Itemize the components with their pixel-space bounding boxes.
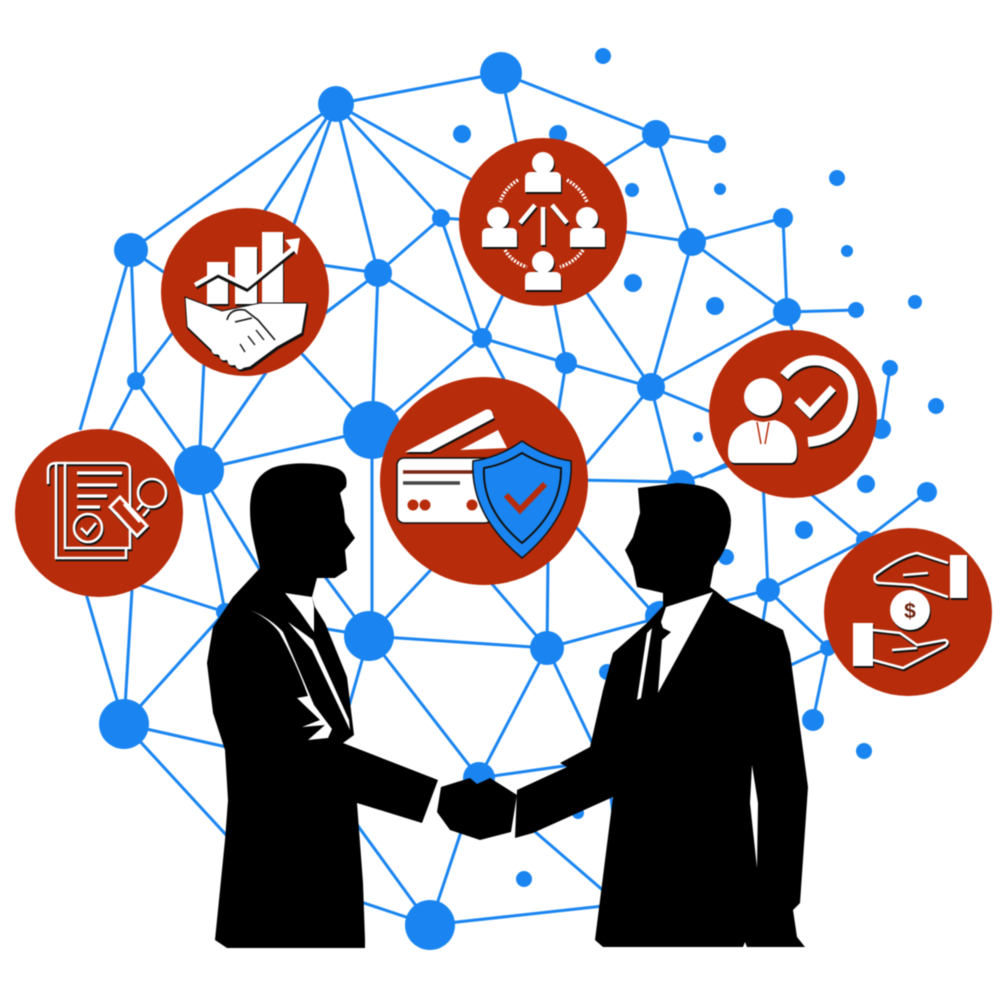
icon: credit cards and shield — [380, 377, 588, 585]
right man jacket gap — [750, 765, 758, 868]
icon: team network — [459, 138, 627, 306]
network: connected nodes — [99, 52, 937, 950]
dotted ring between people — [500, 180, 587, 267]
icon: contract document and stamp — [15, 429, 183, 597]
shield with check — [473, 441, 571, 558]
coin dollar sign: $ — [904, 600, 916, 623]
silhouette: left businessman — [207, 463, 438, 948]
icon: growth chart and handshake — [161, 208, 329, 376]
network: isolated dots — [453, 48, 944, 887]
right man collar and shirt — [637, 592, 713, 700]
icon: hands with coin — [824, 528, 992, 696]
left man shirt and lapel highlights — [250, 593, 350, 740]
handshake — [437, 778, 517, 840]
network: connecting lines — [80, 73, 927, 925]
icon: person with approval check — [709, 330, 877, 498]
silhouette: right businessman — [515, 483, 808, 947]
